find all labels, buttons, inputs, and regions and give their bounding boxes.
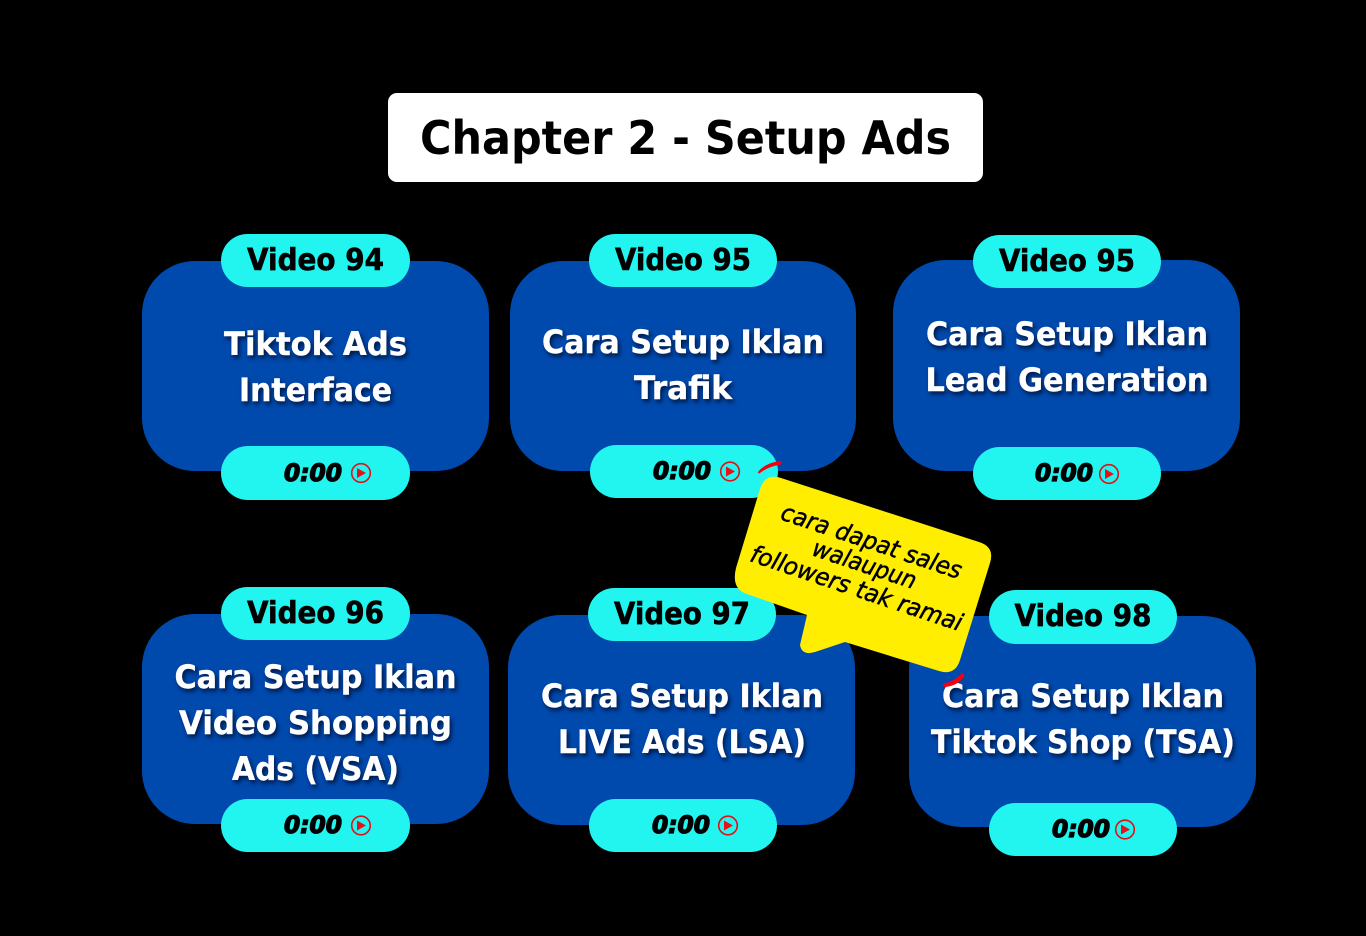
callout: yellow speech bubble: cara dapat sales [777, 498, 966, 585]
panel: video 95 lead generation: Lead Generation [926, 361, 1208, 399]
panel: video 94: Interface [239, 371, 392, 409]
red brush mark: upper [758, 461, 782, 473]
panel: video 97: 0:00 [652, 811, 710, 839]
red brush mark: lower [943, 673, 964, 687]
title [388, 93, 983, 182]
panel: video 94: Video 94 [247, 243, 384, 278]
panel: video 96: Ads (VSA) [232, 750, 399, 788]
title: Chapter 2 - Setup Ads [420, 111, 951, 165]
panel: video 97: LIVE Ads (LSA) [558, 723, 806, 761]
panel: video 98: Video 98 [1014, 599, 1152, 634]
panel: video 98: Cara Setup Iklan [942, 677, 1224, 715]
panel: video 96: Video 96 [247, 596, 384, 631]
callout: yellow speech bubble: followers tak ramai [747, 540, 967, 637]
panel: video 95 traffic: Trafik [634, 369, 733, 407]
panel: video 95 traffic [510, 234, 856, 498]
panel: video 96 [142, 587, 489, 852]
panel: video 95 lead generation: Cara Setup Iklan [926, 315, 1208, 353]
panel: video 96: Video Shopping [179, 704, 452, 742]
panel: video 95 lead generation: 0:00 [1035, 459, 1093, 487]
panel: video 94: 0:00 [284, 459, 342, 487]
panel: video 95 traffic: Cara Setup Iklan [542, 323, 824, 361]
panel: video 94 [142, 234, 489, 500]
panel: video 98: Tiktok Shop (TSA) [931, 723, 1235, 761]
panel: video 97: Video 97 [614, 597, 750, 632]
panel: video 98 [909, 590, 1256, 856]
panel: video 95 lead generation: Video 95 [999, 244, 1135, 279]
panel: video 96: 0:00 [284, 811, 342, 839]
panel: video 94: Tiktok Ads [224, 325, 407, 363]
panel: video 97 [508, 588, 855, 852]
callout: yellow speech bubble [735, 477, 991, 672]
callout: yellow speech bubble: walaupun [809, 534, 920, 595]
panel: video 95 lead generation [893, 235, 1240, 500]
panel: video 98: 0:00 [1052, 815, 1110, 843]
panel: video 97: Cara Setup Iklan [541, 677, 823, 715]
panel: video 95 traffic: 0:00 [653, 457, 711, 485]
panel: video 95 traffic: Video 95 [615, 243, 751, 278]
panel: video 96: Cara Setup Iklan [174, 658, 456, 696]
